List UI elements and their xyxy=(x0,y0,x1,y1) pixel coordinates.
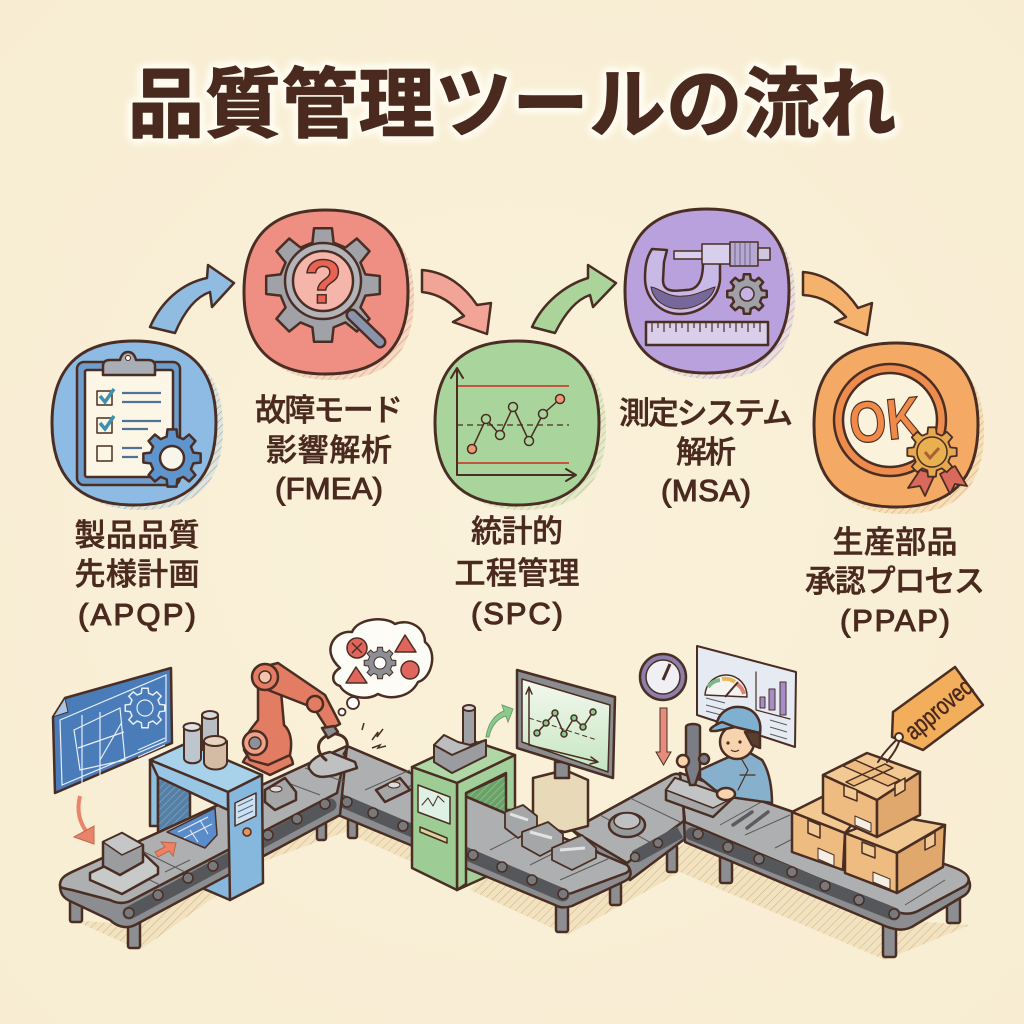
floor shadows xyxy=(73,800,970,960)
dashboard panel xyxy=(697,646,796,747)
approved tag xyxy=(878,667,983,762)
icon: thought gear xyxy=(364,647,396,679)
chart: control chart xyxy=(451,368,576,481)
panel: PPAP badge xyxy=(814,343,984,514)
arrow: gauge to station xyxy=(656,708,671,765)
icon: gear with magnifier: ? xyxy=(304,248,342,317)
label: MSA: 解析 xyxy=(676,435,736,470)
label: PPAP: 承認プロセス xyxy=(805,564,985,599)
label: PPAP: 生産部品 xyxy=(832,525,958,560)
tools on belt D xyxy=(733,812,768,828)
label: SPC: 工程管理 xyxy=(454,556,580,591)
label: SPC: (SPC) xyxy=(471,596,563,631)
robot arm xyxy=(243,663,340,775)
icon: red sad badge xyxy=(401,661,419,679)
panel: FMEA badge xyxy=(244,210,414,380)
cylinders on machine xyxy=(184,711,227,770)
approved tag: approved xyxy=(899,673,979,745)
panel: MSA badge xyxy=(625,209,795,379)
label: APQP: (APQP) xyxy=(78,597,196,632)
blue machine front xyxy=(150,743,263,900)
icon: micrometer, gear and ruler xyxy=(645,242,770,345)
blue drawing on belt xyxy=(167,808,217,848)
conveyor segment C xyxy=(572,774,690,880)
icon: warning triangle xyxy=(395,635,416,652)
label: FMEA: 故障モード xyxy=(255,393,403,428)
gripper with workpiece xyxy=(309,726,357,777)
icon: blueprint gear xyxy=(125,688,165,728)
arrowhead: blueprint to product xyxy=(74,826,94,844)
gauge xyxy=(640,654,686,700)
icon: red X xyxy=(347,638,367,658)
blue machine inner wall xyxy=(158,775,190,838)
parts on belt A xyxy=(265,778,410,810)
label: MSA: (MSA) xyxy=(661,473,751,508)
green machine lower part xyxy=(457,840,495,890)
label: PPAP: (PPAP) xyxy=(840,603,950,638)
label: APQP xyxy=(74,518,200,632)
green machine inner wall xyxy=(466,772,511,830)
icon: OK stamp with medal xyxy=(834,364,967,496)
blueprint sheet xyxy=(53,668,172,793)
conveyor segment D xyxy=(680,773,970,930)
cardboard boxes xyxy=(792,753,945,893)
sparks xyxy=(362,723,386,748)
measuring fixture and tool xyxy=(666,724,735,817)
title: 品質管理ツールの流れ xyxy=(128,63,896,148)
blocks on belt B xyxy=(505,805,596,870)
arrow: MSA to PPAP xyxy=(803,272,872,335)
icon: gear with magnifier xyxy=(266,228,380,342)
arrow: SPC to MSA xyxy=(532,265,616,333)
label: FMEA: (FMEA) xyxy=(275,471,383,506)
sample product on pallet xyxy=(90,833,158,894)
label: MSA xyxy=(619,396,793,508)
box: left xyxy=(792,797,860,870)
icon: warning triangle lower xyxy=(346,667,367,683)
label: APQP: 先様計画 xyxy=(74,557,200,592)
arrow: blueprint to product xyxy=(78,796,90,836)
label: FMEA xyxy=(255,393,403,506)
monitor pedestal xyxy=(533,770,588,832)
label: SPC xyxy=(454,514,580,631)
icon: OK stamp with medal: OK xyxy=(846,384,924,457)
label: MSA: 測定システム xyxy=(619,396,793,431)
conveyor legs xyxy=(70,812,960,957)
conveyor segment B xyxy=(335,746,631,907)
factory block on green machine xyxy=(434,705,486,773)
label: PPAP xyxy=(805,525,985,638)
panel: APQP badge xyxy=(52,341,223,510)
conveyor segment A xyxy=(60,746,347,927)
thought bubble xyxy=(330,619,432,716)
panel: SPC badge xyxy=(435,341,606,510)
box: top xyxy=(823,753,920,837)
disc on belt C xyxy=(609,813,645,837)
arrow: drawing to product xyxy=(155,842,176,857)
worker xyxy=(700,707,772,803)
arrow: FMEA to SPC xyxy=(422,270,491,334)
arrow: machine to monitor xyxy=(486,705,513,737)
label: FMEA: 影響解析 xyxy=(266,433,392,468)
label: APQP: 製品品質 xyxy=(74,518,200,553)
blue machine lower pillar xyxy=(195,840,230,900)
label: SPC: 統計的 xyxy=(471,514,563,549)
blue machine rear pillar xyxy=(150,760,158,826)
icon: clipboard checklist xyxy=(77,352,201,487)
arrow: APQP to FMEA xyxy=(150,265,234,333)
box: right xyxy=(845,815,945,893)
green machine front xyxy=(412,740,515,890)
SPC monitor xyxy=(517,670,615,778)
